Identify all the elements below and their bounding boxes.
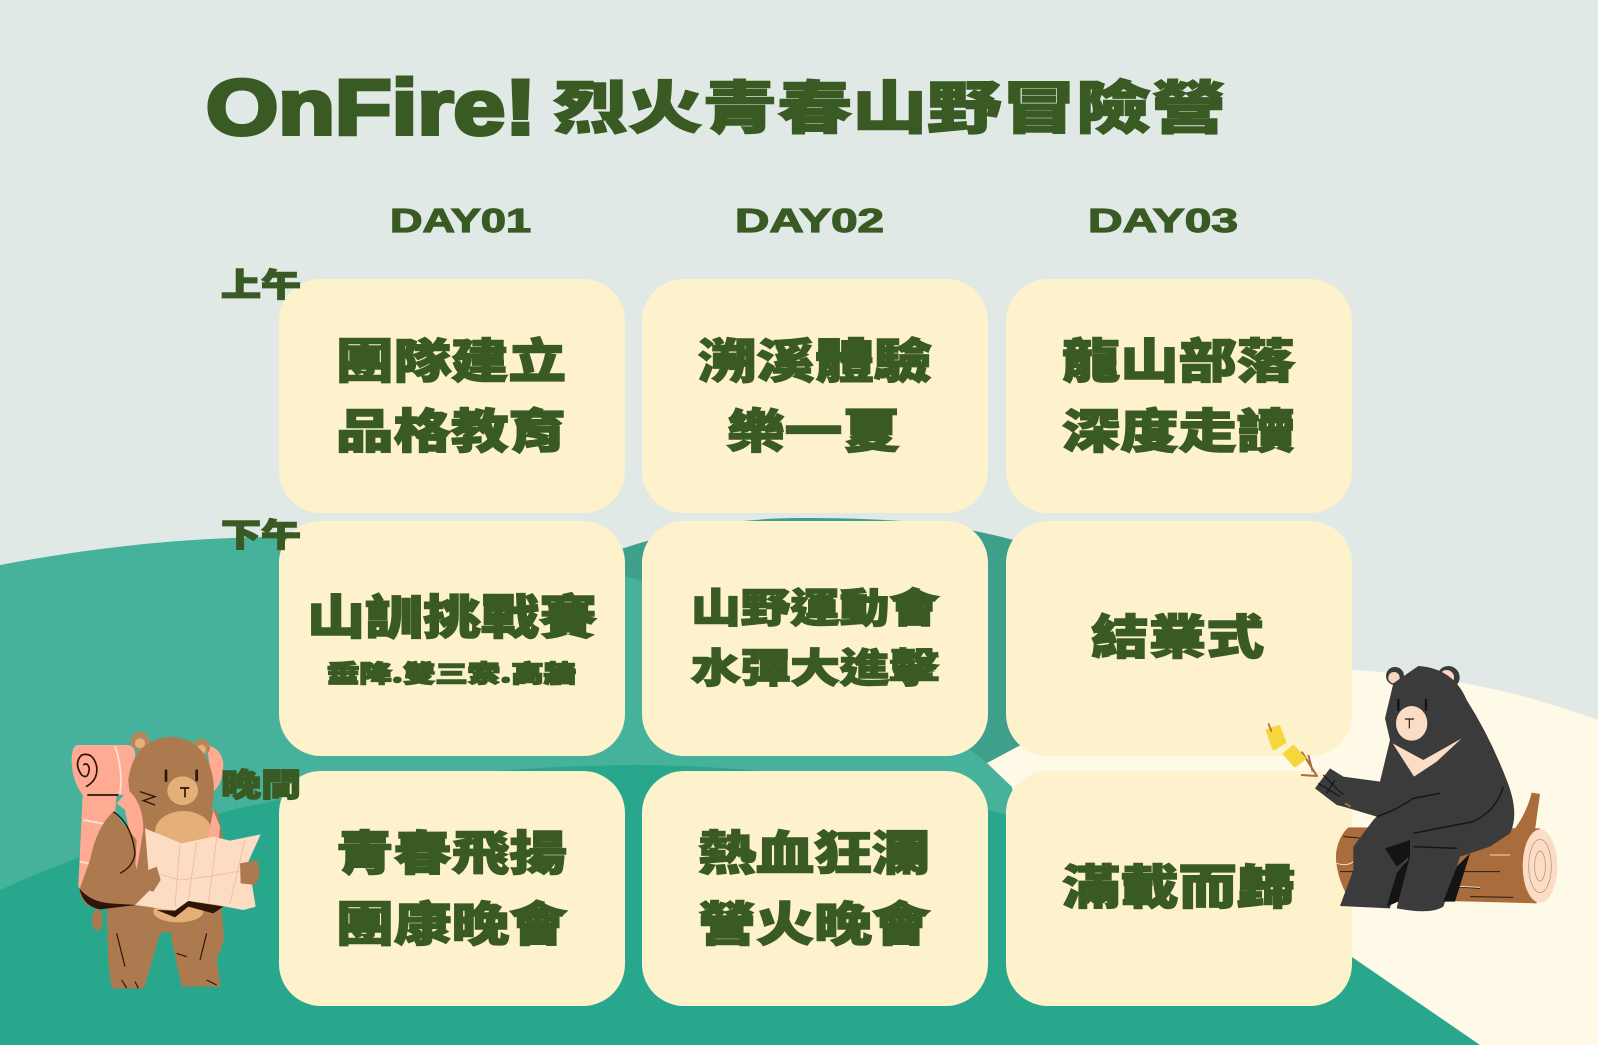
tail [92, 909, 103, 931]
hill: left light teal [0, 537, 1020, 900]
map [135, 828, 261, 911]
strap [117, 790, 143, 870]
skewer [1301, 752, 1351, 807]
card: day 2 afternoon: 水彈大進擊 [691, 636, 939, 694]
card: day 3 afternoon [1006, 521, 1352, 756]
log cut end [1523, 829, 1557, 903]
card: day 1 morning [279, 279, 625, 513]
card: day 3 morning [1006, 279, 1352, 513]
icon: brown bear hiker with map [72, 732, 261, 988]
limb shadows [1385, 840, 1470, 907]
card: day 3 evening: 滿載而歸 [1062, 849, 1295, 918]
title [206, 63, 1226, 151]
ears [131, 732, 149, 750]
ears [1386, 667, 1404, 685]
marshmallows [1267, 727, 1285, 749]
title: OnFire! [206, 63, 536, 151]
card: day 2 morning: 樂一夏 [727, 393, 900, 462]
column heading: DAY03: DAY03 [1088, 202, 1238, 239]
fist lines [1318, 775, 1343, 797]
row label: evening: 晚間 [221, 760, 301, 806]
card: day 1 morning: 品格教育 [336, 393, 566, 462]
icon: black bear on log with skewer [1267, 666, 1557, 911]
card: day 1 evening: 團康晚會 [336, 886, 567, 955]
card: day 1 morning: 團隊建立 [336, 323, 566, 392]
card: day 2 evening: 熱血狂瀾 [698, 815, 930, 884]
card: day 2 afternoon: 山野運動會 [691, 576, 939, 634]
arm and torso side [79, 812, 160, 908]
card: day 1 evening [279, 771, 625, 1006]
column heading: DAY01: DAY01 [390, 202, 531, 239]
card: day 2 evening: 營火晚會 [698, 886, 930, 955]
card: day 1 afternoon [279, 521, 625, 756]
hands [140, 867, 161, 892]
card: day 1 afternoon: 山訓挑戰賽 [307, 579, 597, 648]
hill: right cream [987, 670, 1598, 1045]
muzzle and eyes [167, 776, 198, 805]
card: day 2 evening [642, 771, 988, 1006]
card: day 3 evening [1006, 771, 1352, 1006]
card: day 3 morning: 龍山部落 [1062, 323, 1295, 392]
title: 烈火青春山野冒險營 [553, 63, 1226, 145]
chest mark [1393, 738, 1462, 777]
hill: center dark teal [600, 518, 1040, 820]
hill: front dark teal [0, 765, 1480, 1045]
row label: morning: 上午 [221, 260, 301, 306]
card: day 1 evening: 青春飛揚 [336, 815, 567, 884]
log [1336, 827, 1540, 903]
card: day 2 afternoon [642, 521, 988, 756]
card: day 2 morning: 溯溪體驗 [698, 323, 932, 392]
belly [155, 811, 212, 852]
muzzle [1396, 706, 1427, 741]
head [128, 737, 214, 823]
card: day 2 morning [642, 279, 988, 513]
card: day 1 afternoon: 垂降.雙三索.高牆 [327, 654, 576, 689]
log branch [1513, 793, 1540, 831]
fur marks [117, 933, 217, 988]
legs and body [107, 810, 224, 988]
backpack bedroll [72, 745, 135, 893]
card: day 3 morning: 深度走讀 [1062, 393, 1295, 462]
card: day 3 afternoon: 結業式 [1091, 599, 1264, 668]
column heading: DAY02: DAY02 [735, 202, 884, 239]
row label: afternoon: 下午 [221, 510, 301, 556]
body [1315, 666, 1514, 911]
